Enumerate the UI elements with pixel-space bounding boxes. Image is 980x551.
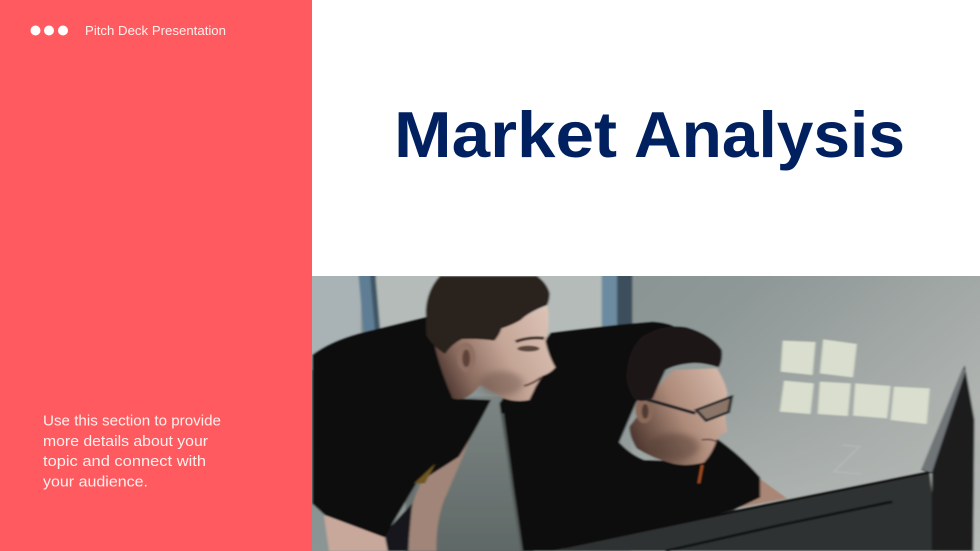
- title: Analysis: [634, 98, 905, 171]
- deck label: Pitch Deck Presentation: [85, 23, 226, 38]
- text block: section description: [43, 412, 221, 490]
- text block: section description: your audience.: [43, 474, 148, 490]
- office chair: [499, 322, 678, 551]
- text block: section description: Use this section to provide: [43, 412, 221, 430]
- sticky notes on the wall: [780, 339, 930, 424]
- eyeglasses: [646, 397, 732, 421]
- computer monitor: [551, 365, 974, 551]
- man seated with glasses: [568, 326, 787, 546]
- title: Market: [394, 98, 617, 171]
- title: [394, 98, 905, 171]
- man standing on the left: [312, 276, 555, 551]
- icon: three dots: [30, 26, 68, 36]
- panel: coral sidebar: [0, 0, 312, 551]
- text block: section description: more details about your: [43, 433, 208, 450]
- photo: two men looking at a monitor: [312, 276, 980, 551]
- office wall background: [308, 270, 980, 551]
- whiteboard scribble: [856, 446, 860, 448]
- text block: section description: topic and connect with: [43, 453, 206, 470]
- header: three dots and deck label: [30, 23, 226, 38]
